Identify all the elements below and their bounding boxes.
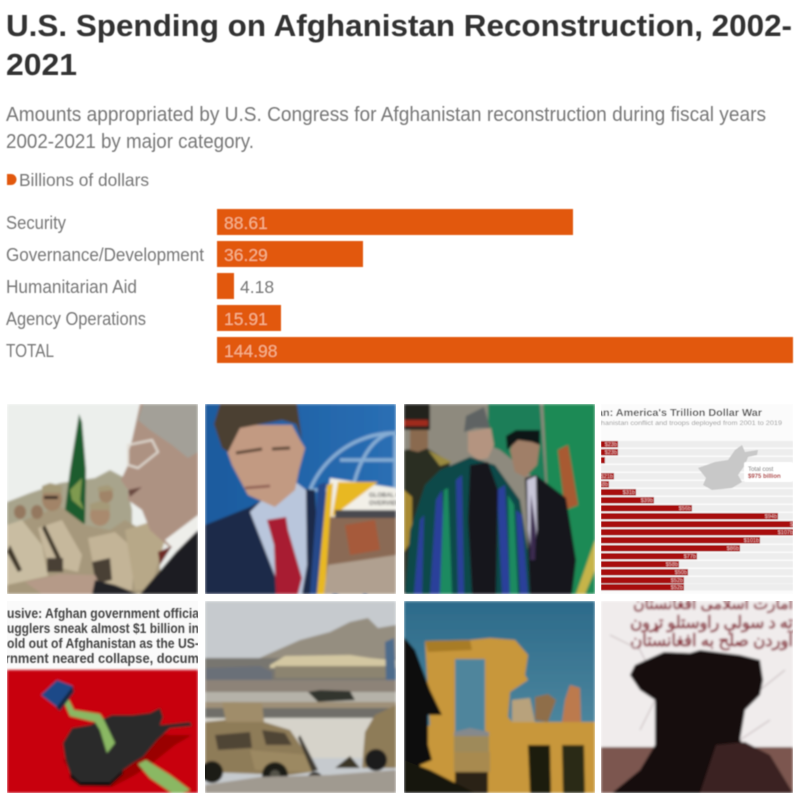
bar value labels: $56b	[679, 506, 691, 512]
bar: Security: 88.61	[224, 213, 268, 233]
headline: rnment neared collapse, docum	[5, 650, 199, 666]
Afghanistan map	[698, 445, 758, 490]
headline	[5, 605, 199, 666]
photo: ruined building against blue sky	[404, 601, 595, 793]
bar value labels: $77b	[684, 554, 696, 560]
bar: TOTAL	[6, 337, 793, 363]
bar: Humanitarian Aid: Humanitarian Aid	[6, 277, 137, 297]
bar: Security	[6, 209, 573, 235]
total cost callout: $975 billion	[748, 474, 781, 480]
bar: Humanitarian Aid: 4.18	[240, 277, 274, 297]
bar value labels: $23b	[605, 442, 617, 448]
bar: Governance/Development	[6, 241, 363, 267]
title: U.S. Spending on Afghanistan Reconstruction, 2002-	[6, 8, 792, 43]
bar: Humanitarian Aid	[6, 273, 274, 299]
subtitle	[6, 104, 766, 153]
banner text: آوردن صلح به افغانستان	[630, 629, 794, 651]
bar value labels: $52b	[671, 578, 683, 584]
chart image: America's Trillion Dollar War	[590, 404, 793, 594]
headline: ugglers sneak almost $1 billion in	[7, 620, 199, 636]
bar value labels: $39b	[641, 498, 653, 504]
photo: man with Global Humanitarian Overview report	[205, 404, 396, 594]
bar value labels: $23b	[605, 450, 617, 456]
bar value labels: $58b	[666, 562, 678, 568]
total cost callout	[744, 462, 793, 482]
photo: leader in green striped robe	[404, 404, 595, 594]
bar value labels: $86b	[727, 546, 739, 552]
legend: Billions of dollars	[19, 170, 149, 190]
photo: military vehicles at Kabul airport	[201, 601, 396, 793]
bar: Security: Security	[6, 213, 66, 233]
news article image: gold smuggling	[5, 601, 199, 793]
bar: Governance/Development: Governance/Development	[6, 245, 204, 265]
bar value labels: $8b	[599, 482, 608, 488]
bar: Agency Operations: 15.91	[224, 309, 268, 329]
illustration: map with money trail	[7, 670, 198, 793]
title second line: 2021	[6, 47, 77, 82]
bar value labels	[599, 442, 793, 591]
bar value labels: $	[790, 522, 793, 528]
bar: TOTAL: 144.98	[224, 341, 278, 361]
photo: man with Global Humanitarian Overview report: OVERVIEW 2	[369, 501, 407, 507]
bar value labels: $101b	[744, 538, 759, 544]
photo: official addressing soldiers	[7, 404, 198, 594]
bar: Agency Operations: Agency Operations	[6, 309, 146, 329]
photo: man with Global Humanitarian Overview report: GLOBAL HU	[369, 493, 405, 499]
bar value labels: $107b	[778, 530, 793, 536]
banner text: امارت اسلامی افغانستان	[633, 596, 793, 614]
bar value labels: $31b	[623, 490, 635, 496]
chart image heading: an: America's Trillion Dollar War	[597, 407, 762, 419]
chart image subtitle: Afghanistan conflict and troops deployed from 2001 to 2019	[590, 420, 782, 427]
banner text	[630, 596, 794, 651]
headline: old out of Afghanistan as the US-	[7, 635, 199, 651]
bar value labels: $21b	[601, 474, 613, 480]
subtitle: Amounts appropriated by U.S. Congress for Afghanistan reconstruction during fiscal years	[6, 104, 766, 126]
bar: TOTAL: TOTAL	[6, 341, 54, 361]
red bars	[601, 441, 793, 590]
bar: Governance/Development: 36.29	[224, 245, 268, 265]
photo: silhouette of Taliban figure before banner	[601, 596, 794, 793]
bar value labels: $52b	[671, 585, 683, 591]
bar value labels: $94b	[765, 514, 777, 520]
headline: usive: Afghan government officia	[7, 605, 199, 621]
bar: Agency Operations	[6, 305, 281, 331]
bar chart	[6, 209, 793, 363]
background row strips	[601, 441, 793, 590]
subtitle: 2002-2021 by major category.	[6, 131, 254, 153]
bar value labels: $50b	[675, 570, 687, 576]
banner text: ته د سولې راوستلو تړون	[630, 613, 793, 635]
total cost callout: Total cost	[748, 467, 774, 473]
